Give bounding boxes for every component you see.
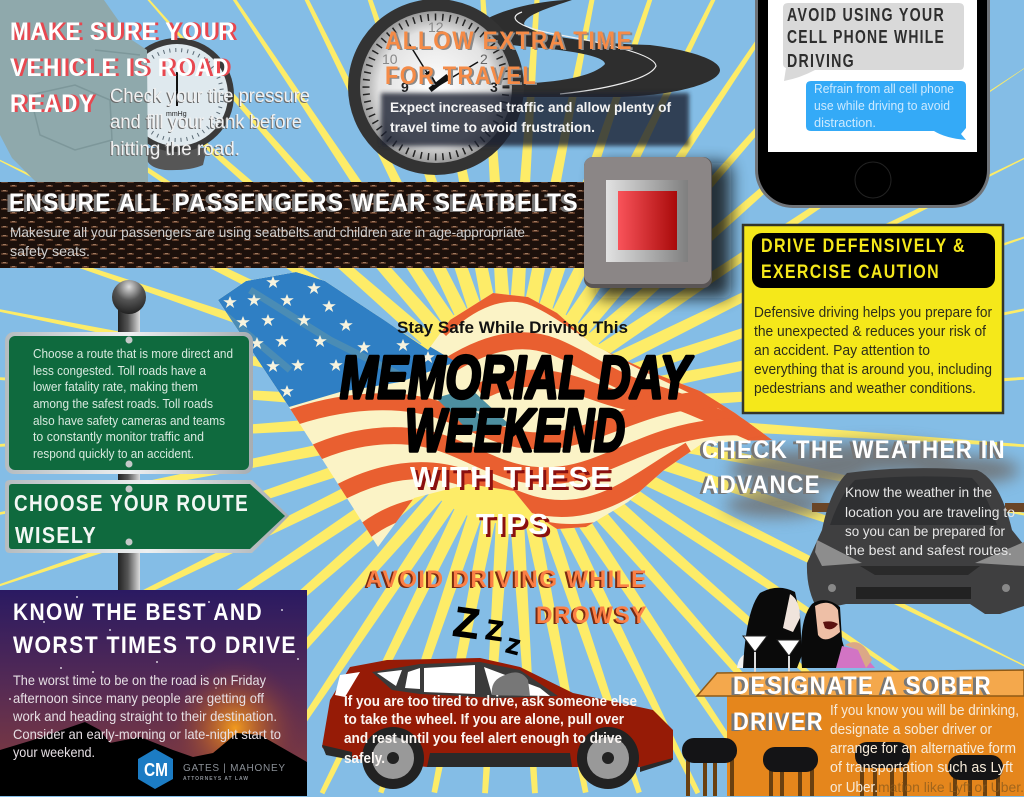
- heading: avoid using your cell phone: DRIVING: [787, 51, 855, 71]
- blue message bubble: [806, 81, 966, 140]
- panel: avoid driving while drowsy: [322, 566, 673, 789]
- text: defensive driving tip: everything that is around you, including: [754, 362, 992, 378]
- text: defensive driving tip: [754, 305, 992, 397]
- panel: check the weather: [702, 436, 1024, 614]
- heading: make sure your vehicle is road ready: READY: [10, 90, 95, 118]
- heading: know the best and worst times: WORST TIMES TO DRIVE: [13, 632, 297, 659]
- title: Memorial Day Weekend: MEMORIAL DAY: [340, 344, 694, 411]
- text: tire pressure tip: and fill your tank before: [110, 112, 302, 133]
- text: sober driver tip: designate a sober driver or: [830, 722, 992, 738]
- heading: choose your route wisely: WISELY: [15, 522, 97, 548]
- icon: pressure gauge: [120, 38, 234, 170]
- icon: sleeping Z letters: Z: [450, 598, 482, 648]
- panel: seatbelts: [0, 157, 731, 298]
- yellow sign: [743, 225, 1003, 413]
- buckle shadow: [596, 163, 731, 298]
- text: seatbelt tip: Makesure all your passengers are using seatbelts and children are in age-appropriate: [10, 224, 525, 240]
- text: route tip: less congested. Toll roads have a: [33, 364, 206, 378]
- text: weather tip: the best and safest routes.: [845, 542, 1012, 558]
- text: sober driver tip: [830, 703, 1019, 796]
- panel: choose your route: [5, 280, 289, 590]
- text: route tip: also have safety cameras and teams: [33, 414, 225, 428]
- heading: avoid driving while drowsy: AVOID DRIVING WHILE: [366, 566, 648, 593]
- panel: vehicle road ready: [0, 0, 310, 182]
- text: defensive driving tip: the unexpected & reduces your risk of: [754, 324, 987, 340]
- ghost text behind tip: mation like Lyft or Uber.: [878, 779, 1024, 795]
- text: drowsy driving tip: and rest until you feel alert enough to drive: [344, 731, 622, 747]
- title: Memorial Day Weekend: WEEKEND: [405, 397, 625, 464]
- icon: clock: 9: [401, 79, 409, 95]
- icon: sign pole: [112, 280, 146, 590]
- flag: [210, 265, 790, 555]
- logo: Cates Mahoney: ATTORNEYS AT LAW: [183, 776, 248, 782]
- green info sign: [5, 332, 253, 474]
- heading: make sure your vehicle is road ready: [10, 18, 236, 118]
- title: with these tips: TIPS: [476, 509, 550, 541]
- text: traffic tip: [390, 99, 671, 135]
- heading: designate a sober driver: DESIGNATE A SOBER: [733, 672, 992, 700]
- text: timing tip: Consider an early-morning or late-night start to: [13, 726, 281, 742]
- sunset glow: [165, 658, 305, 797]
- logo: Cates Mahoney: CM: [144, 760, 168, 780]
- panel: drive defensively: [743, 225, 1003, 413]
- stars: [9, 596, 299, 700]
- icon: pressure gauge: mmHg: [166, 111, 187, 118]
- text: timing tip: work and heading straight to their destination.: [12, 708, 277, 724]
- text: sober driver tip: or Uber.: [830, 780, 878, 796]
- text: route tip: to constantly monitor traffic and: [33, 430, 204, 444]
- icon: dark car front: [807, 468, 1024, 614]
- heading: choose your route wisely: [14, 490, 249, 548]
- gray message bubble: [783, 3, 964, 81]
- icon: bar stools: [682, 738, 1003, 796]
- panel: best and worst times: [0, 590, 307, 797]
- text: defensive driving tip: pedestrians and weather conditions.: [754, 381, 976, 397]
- text: sober driver tip: of transportation such as Lyft: [830, 760, 1013, 776]
- text: drowsy driving tip: to take the wheel. If you are alone, pull over: [344, 712, 624, 728]
- icon: clock: 2: [480, 51, 488, 67]
- icon: buckle: [584, 157, 712, 288]
- heading: avoid using your cell phone: [787, 5, 945, 71]
- heading: allow extra time for travel: [385, 27, 633, 90]
- text: route tip: [33, 347, 233, 461]
- title: with these tips: WITH THESE: [410, 462, 612, 494]
- text: refrain from phone use: distraction.: [814, 115, 876, 130]
- seatbelt strap: [0, 182, 590, 268]
- icon: storm cloud: [725, 442, 1020, 517]
- text: route tip: lower fatality rate, making them: [33, 380, 198, 394]
- heading: check the weather in advance: ADVANCE: [702, 471, 821, 499]
- heading: check the weather in advance: [702, 436, 1006, 499]
- text: traffic tip: Expect increased traffic and allow plenty of: [390, 99, 671, 115]
- text: drowsy driving tip: If you are too tired to drive, ask someone else: [344, 694, 637, 710]
- text: weather tip: so you can be prepared for: [845, 523, 1005, 539]
- text: tire pressure tip: hitting the road.: [110, 139, 240, 160]
- text: timing tip: your weekend.: [13, 744, 95, 760]
- heading: avoid using your cell phone: AVOID USING YOUR: [787, 5, 945, 25]
- heading: designate a sober driver: DRIVER: [733, 708, 824, 736]
- heading: drive defensively: DRIVE DEFENSIVELY &: [761, 236, 966, 257]
- heading: know the best and worst times: KNOW THE BEST AND: [13, 599, 263, 626]
- icon: clock: [348, 0, 524, 175]
- heading: make sure your vehicle is road ready: MAKE SURE YOUR: [10, 18, 236, 46]
- title: Memorial Day Weekend: [340, 344, 694, 464]
- heading: designate a sober driver: [733, 672, 992, 736]
- heading: avoid using your cell phone: CELL PHONE WHILE: [787, 27, 945, 47]
- icon: sleeping Z letters: Z: [484, 614, 505, 647]
- text: weather tip: Know the weather in the: [845, 484, 992, 500]
- heading: drive defensively: [761, 236, 966, 283]
- green arrow sign: [5, 480, 289, 553]
- panel: designate a sober driver: [682, 588, 1024, 796]
- text: drowsy driving tip: safely.: [344, 751, 385, 767]
- heading: allow extra time for travel: FOR TRAVEL: [385, 62, 537, 90]
- dark text backing: [381, 93, 689, 146]
- mountains: [0, 722, 307, 796]
- icon: sleeping Z letters: Z: [504, 634, 522, 660]
- black heading bar: [752, 233, 995, 288]
- text: route tip: respond quickly to an accident.: [33, 447, 194, 461]
- icon: phone: [755, 0, 990, 208]
- heading: ensure all passengers wear seatbelts: ENSURE ALL PASSENGERS WEAR SEATBELTS: [9, 189, 579, 217]
- icon: sleeping Z letters: [450, 598, 522, 660]
- heading: know the best and worst times: [13, 599, 297, 659]
- text: weather tip: [845, 484, 1015, 558]
- heading: choose your route wisely: CHOOSE YOUR ROUTE: [14, 490, 249, 516]
- panel: avoid using your cell phone: [755, 0, 990, 208]
- title: with these tips: [410, 462, 612, 541]
- main title block: [340, 319, 694, 541]
- text: refrain from phone use: [814, 81, 954, 130]
- text: route tip: Choose a route that is more direct and: [33, 347, 233, 361]
- text: drowsy driving tip: [344, 694, 637, 767]
- icon: clock: 10: [382, 51, 398, 67]
- text: sober driver tip: arrange for an alternative form: [830, 741, 1016, 757]
- heading: avoid driving while drowsy: DROWSY: [536, 602, 648, 629]
- text: route tip: among the safest roads. Toll roads: [33, 397, 213, 411]
- subtitle: Stay Safe While Driving This: [397, 319, 628, 337]
- text: timing tip: [12, 672, 281, 760]
- text: timing tip: The worst time to be on the road is on Friday: [13, 672, 266, 688]
- text: defensive driving tip: an accident. Pay attention to: [754, 343, 930, 359]
- text: seatbelt tip: safety seats.: [10, 243, 90, 259]
- logo: Cates Mahoney: [138, 749, 285, 789]
- logo: Cates Mahoney: GATES | MAHONEY: [183, 763, 285, 774]
- icon: red SUV: [322, 658, 673, 789]
- icon: two women laughing: [737, 588, 875, 668]
- icon: clock: 3: [490, 79, 498, 95]
- text: traffic tip: travel time to avoid frustration.: [390, 119, 595, 135]
- heading: drive defensively: EXERCISE CAUTION: [761, 262, 940, 283]
- icon: jerry can: [0, 0, 148, 182]
- icon: clock: 12: [428, 19, 444, 35]
- icon: bar counter: [697, 670, 1024, 796]
- text: seatbelt tip: [10, 224, 525, 259]
- icon: winding road: [470, 0, 720, 97]
- heading: avoid driving while drowsy: [366, 566, 648, 629]
- text: defensive driving tip: Defensive driving helps you prepare for: [754, 305, 992, 321]
- night sky: [0, 590, 307, 796]
- text: refrain from phone use: Refrain from all cell phone: [814, 81, 954, 96]
- text: weather tip: location you are traveling to: [845, 504, 1015, 520]
- text: timing tip: afternoon since many people are getting off: [13, 690, 264, 706]
- panel: allow extra time: [348, 0, 720, 175]
- text: refrain from phone use: use while driving to avoid: [814, 98, 950, 113]
- icon: martini glasses: [743, 636, 800, 676]
- text: tire pressure tip: [110, 86, 310, 160]
- heading: allow extra time for travel: ALLOW EXTRA TIME: [385, 27, 633, 55]
- text: tire pressure tip: Check your tire pressure: [110, 86, 310, 107]
- heading: make sure your vehicle is road ready: VEHICLE IS ROAD: [10, 54, 230, 82]
